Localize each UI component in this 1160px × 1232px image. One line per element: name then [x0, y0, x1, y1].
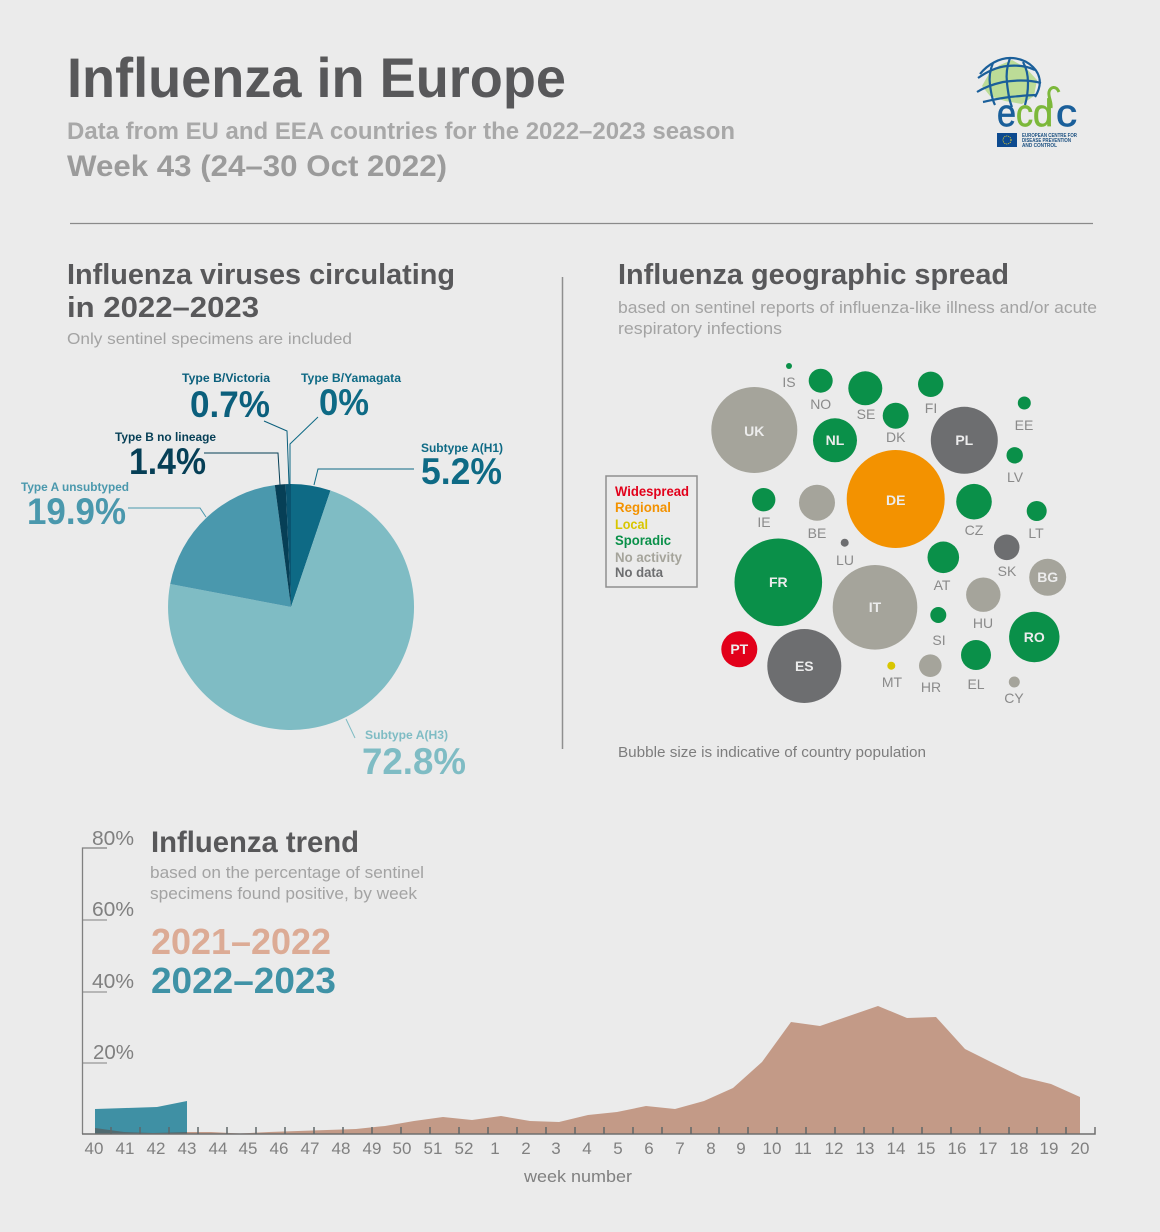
- bubble map: ES: [795, 658, 814, 674]
- subtitle: Data from EU and EEA countries for the 2022–2023 season: [67, 118, 735, 145]
- x axis: 9: [736, 1139, 746, 1158]
- x axis: 15: [917, 1139, 935, 1158]
- heading: viruses circulating: [67, 259, 455, 324]
- callout: Type A unsubtyped: 19.9%: [27, 491, 126, 532]
- logo wordmark: e: [997, 93, 1016, 135]
- bubble map: AT: [934, 577, 951, 593]
- y axis: 20%: [93, 1042, 134, 1064]
- note: bubble size: Bubble size is indicative of country population: [618, 744, 926, 761]
- x axis: 16: [948, 1139, 966, 1158]
- bubble map: LT: [1028, 525, 1044, 541]
- callout: Type B/Yamagata: Type B/Yamagata: [301, 371, 401, 385]
- bubble map: NL: [826, 432, 845, 448]
- logo wordmark: c: [1016, 93, 1033, 135]
- x axis: 42: [147, 1139, 165, 1158]
- subheading: influenza trend: based on the percentage of sentinel: [150, 863, 424, 882]
- bubble map: DK: [886, 429, 906, 445]
- callout: Type B no lineage: [115, 430, 280, 485]
- x axis: 20: [1071, 1139, 1089, 1158]
- x axis: 40: [85, 1139, 103, 1158]
- bubble map: UK: [744, 423, 764, 439]
- legend: Local: [615, 517, 648, 532]
- x axis: 5: [613, 1139, 623, 1158]
- bubble map: FR: [769, 574, 788, 590]
- x axis: 51: [424, 1139, 442, 1158]
- callout: Type B/Yamagata: 0%: [319, 382, 369, 423]
- bubble map: CZ: [965, 522, 984, 538]
- bubble map: PT: [730, 641, 749, 657]
- legend: seasons: [151, 921, 336, 1001]
- bubble map: HU: [973, 615, 993, 631]
- legend: [606, 476, 697, 587]
- x axis: 48: [332, 1139, 350, 1158]
- title: Influenza in Europe: [67, 46, 566, 109]
- subheading: influenza trend: [150, 863, 424, 903]
- bubble map: SI: [932, 632, 946, 648]
- callout: Type B/Victoria: [182, 371, 289, 484]
- callout: Subtype A(H3): 72.8%: [362, 741, 466, 782]
- bubble map: LV: [1007, 469, 1024, 485]
- x axis: week number: [523, 1167, 632, 1186]
- callout: Type B no lineage: Type B no lineage: [115, 430, 216, 444]
- x axis: 46: [270, 1139, 288, 1158]
- callout: Subtype A(H1): 5.2%: [421, 451, 502, 492]
- x axis: [82, 1127, 1095, 1186]
- logo wordmark: c: [1056, 93, 1077, 135]
- bubble map: [711, 363, 1066, 706]
- y axis: 80%: [92, 828, 134, 850]
- bubble map: EE: [1015, 417, 1033, 433]
- pie chart: [168, 484, 414, 730]
- bubble map: BE: [808, 525, 826, 541]
- callout: Subtype A(H1): Subtype A(H1): [421, 441, 503, 455]
- bubble map: LU: [836, 552, 854, 568]
- subheading: geographic spread: respiratory infections: [618, 319, 782, 338]
- ECDC logo: [977, 58, 1077, 149]
- y axis: 40%: [92, 971, 134, 993]
- legend: Regional: [615, 500, 671, 515]
- bubble map: PL: [955, 432, 974, 448]
- x axis: 3: [551, 1139, 561, 1158]
- callout: Subtype A(H1): [314, 441, 503, 492]
- bubble map: NO: [810, 396, 831, 412]
- x axis: 7: [675, 1139, 685, 1158]
- logo wordmark: [997, 87, 1077, 135]
- panel: viruses circulating: [21, 259, 503, 782]
- legend: No activity: [615, 550, 682, 565]
- area: 2021-2022 season: [95, 1006, 1080, 1134]
- bubble map: FI: [925, 400, 937, 416]
- heading: viruses circulating: in 2022–2023: [67, 292, 259, 324]
- bubble map: BG: [1037, 569, 1058, 585]
- subheading: geographic spread: based on sentinel reports of influenza-like illness and/or acute: [618, 298, 1097, 317]
- y axis: [82, 828, 134, 1134]
- subheading: influenza trend: specimens found positive, by week: [150, 884, 417, 903]
- legend: No data: [615, 565, 663, 580]
- x axis: 13: [856, 1139, 874, 1158]
- area: 2022-2023 season: [95, 1101, 187, 1134]
- bubble map: IE: [757, 514, 771, 530]
- x axis: 44: [209, 1139, 227, 1158]
- logo wordmark: d: [1033, 93, 1053, 135]
- heading: geographic spread: Influenza geographic spread: [618, 259, 1009, 291]
- x axis: 8: [706, 1139, 716, 1158]
- bubble map: DE: [886, 492, 905, 508]
- bubble map: IS: [782, 374, 796, 390]
- x axis: 10: [763, 1139, 781, 1158]
- heading: viruses circulating: Influenza viruses circulating: [67, 259, 455, 291]
- x axis: 12: [825, 1139, 843, 1158]
- ECDC logo: EUROPEAN CENTRE FOR: [1022, 133, 1077, 139]
- callout: Subtype A(H3): Subtype A(H3): [365, 728, 448, 742]
- bubble map: SE: [857, 406, 875, 422]
- bubble map: HR: [921, 679, 941, 695]
- x axis: 43: [178, 1139, 196, 1158]
- callout: Type B no lineage: 1.4%: [129, 441, 206, 482]
- callout: Type B/Yamagata: [290, 371, 401, 484]
- week heading: Week 43 (24–30 Oct 2022): [67, 150, 447, 183]
- x axis: 52: [455, 1139, 473, 1158]
- panel: geographic spread: [606, 259, 1097, 761]
- callout: Type A unsubtyped: [21, 480, 206, 532]
- x axis: 18: [1010, 1139, 1028, 1158]
- callout: Type B/Victoria: Type B/Victoria: [182, 371, 270, 385]
- y axis: 60%: [92, 899, 134, 921]
- callout: Type B/Victoria: 0.7%: [190, 384, 270, 425]
- x axis: 49: [363, 1139, 381, 1158]
- callout: Type A unsubtyped: Type A unsubtyped: [21, 480, 129, 494]
- legend: seasons: 2022–2023: [151, 960, 336, 1001]
- panel: influenza trend: [82, 826, 1095, 1186]
- x axis: 11: [794, 1139, 812, 1158]
- x axis: 19: [1040, 1139, 1058, 1158]
- heading: influenza trend: Influenza trend: [151, 826, 359, 859]
- bubble map: MT: [882, 674, 903, 690]
- x axis: 4: [582, 1139, 592, 1158]
- x axis: 47: [301, 1139, 319, 1158]
- x axis: 50: [393, 1139, 411, 1158]
- legend: seasons: 2021–2022: [151, 921, 331, 962]
- x axis: 1: [490, 1139, 500, 1158]
- bubble map: RO: [1024, 629, 1045, 645]
- bubble map: EL: [967, 676, 985, 692]
- ECDC logo: AND CONTROL: [1022, 143, 1057, 149]
- x axis: 14: [887, 1139, 905, 1158]
- subheading: geographic spread: [618, 298, 1097, 338]
- note: sentinel specimens: Only sentinel specimens are included: [67, 331, 352, 348]
- bubble map: IT: [869, 599, 882, 615]
- legend: Widespread: [615, 484, 689, 499]
- x axis: 6: [644, 1139, 654, 1158]
- bubble map: CY: [1004, 690, 1024, 706]
- x axis: 45: [239, 1139, 257, 1158]
- x axis: 2: [521, 1139, 531, 1158]
- legend: Sporadic: [615, 533, 671, 548]
- x axis: 17: [979, 1139, 997, 1158]
- x axis: 41: [116, 1139, 134, 1158]
- ECDC logo: DISEASE PREVENTION: [1022, 138, 1071, 144]
- bubble map: SK: [998, 563, 1017, 579]
- callout: Subtype A(H3): [346, 719, 466, 782]
